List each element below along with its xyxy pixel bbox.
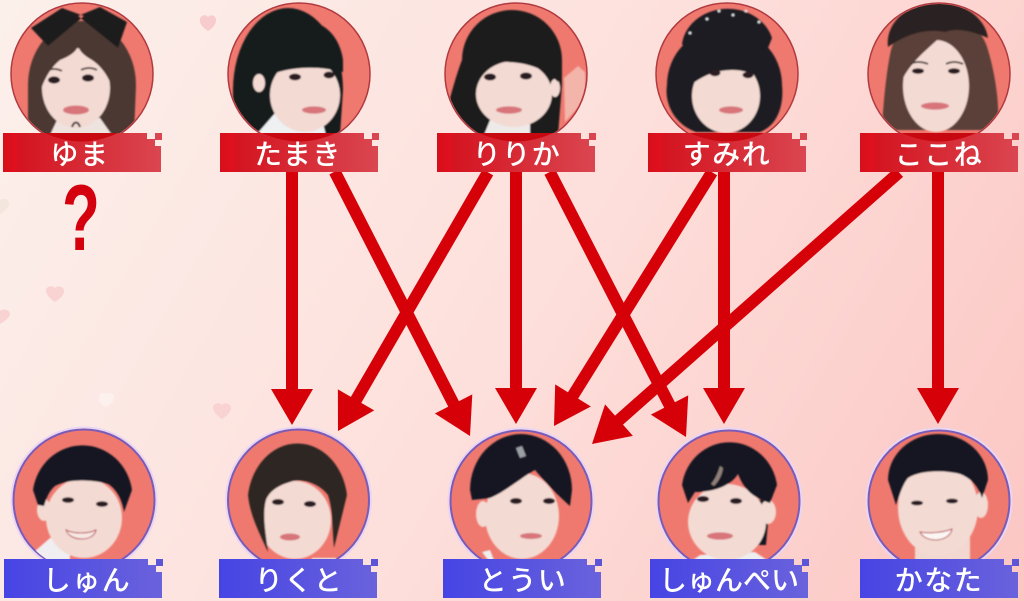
name label: しゅんぺい bbox=[650, 559, 809, 598]
arrow: りりか to しゅんぺい bbox=[531, 162, 705, 447]
person: かなた bbox=[860, 429, 1019, 598]
name label: ここね: ここね bbox=[895, 139, 983, 170]
person: しゅんぺい bbox=[650, 429, 809, 598]
person: りくと bbox=[219, 428, 378, 598]
person: ゆま bbox=[3, 3, 162, 172]
arrow: ここね to とうい bbox=[578, 157, 913, 460]
portrait: しゅんぺい bbox=[657, 429, 801, 573]
name label: りりか: りりか bbox=[473, 139, 561, 170]
person: りりか bbox=[437, 3, 596, 172]
arrow: たまき to りくと bbox=[271, 172, 313, 425]
name label: しゅん bbox=[4, 559, 163, 598]
portrait: とうい bbox=[449, 429, 593, 573]
portrait: りくと bbox=[226, 428, 370, 572]
name label: ゆま: ゆま bbox=[50, 139, 110, 170]
person: とうい bbox=[443, 429, 602, 598]
portrait: ゆま bbox=[11, 3, 153, 145]
name label: しゅんぺい: しゅんぺい bbox=[659, 565, 799, 596]
arrow: すみれ to しゅんぺい bbox=[703, 172, 745, 424]
name label: ゆま bbox=[3, 133, 162, 172]
name label: かなた: かなた bbox=[895, 565, 983, 596]
name label: りくと bbox=[219, 559, 378, 598]
question mark: ? bbox=[62, 165, 100, 270]
arrow: すみれ to とうい bbox=[536, 161, 730, 437]
arrow: りりか to りくと bbox=[320, 162, 506, 442]
arrow: ここね to かなた bbox=[917, 172, 959, 424]
person: すみれ bbox=[648, 3, 807, 172]
name label: とうい: とうい bbox=[479, 565, 567, 596]
decorative hearts bbox=[0, 15, 231, 419]
name label: りくと: りくと bbox=[255, 565, 343, 596]
portrait: りりか bbox=[445, 3, 587, 145]
arrow: たまき to とうい bbox=[316, 162, 489, 446]
name label: とうい bbox=[443, 559, 602, 598]
name label: すみれ bbox=[648, 133, 807, 172]
name label: しゅん: しゅん bbox=[43, 565, 131, 596]
name label: りりか bbox=[437, 133, 596, 172]
person: しゅん bbox=[4, 428, 163, 598]
portrait: すみれ bbox=[656, 3, 798, 145]
person: たまき bbox=[220, 3, 379, 172]
arrows bbox=[271, 157, 959, 460]
portrait: たまき bbox=[228, 3, 370, 145]
name label: かなた bbox=[860, 559, 1019, 598]
name label: すみれ: すみれ bbox=[683, 139, 771, 170]
portrait: ここね bbox=[868, 2, 1010, 145]
name label: たまき: たまき bbox=[254, 139, 342, 170]
name label: ここね bbox=[860, 133, 1019, 172]
arrow: りりか to とうい bbox=[495, 172, 537, 424]
portrait: かなた bbox=[867, 429, 1011, 573]
portrait: しゅん bbox=[12, 428, 156, 572]
name label: たまき bbox=[220, 133, 379, 172]
person: ここね bbox=[860, 2, 1019, 172]
